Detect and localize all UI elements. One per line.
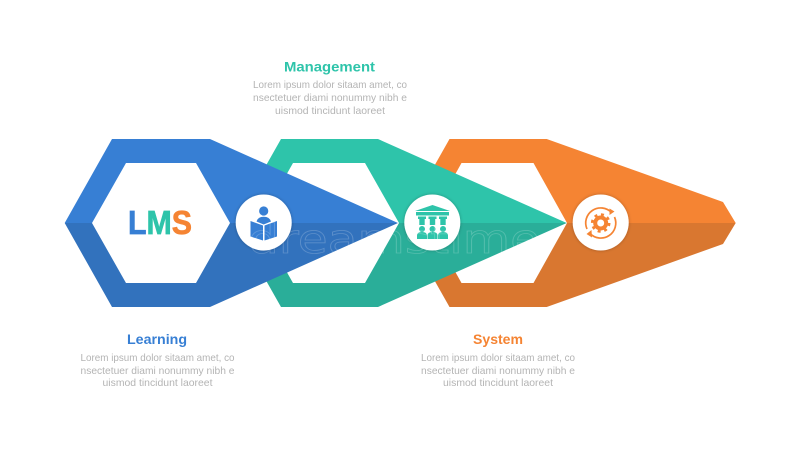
text block: System	[421, 331, 575, 389]
text block: Management	[253, 58, 407, 117]
text block: Management: nsectetuer diami nonummy nibh e	[253, 92, 407, 104]
icon: temple with people	[404, 194, 460, 250]
icon: reader with book	[236, 194, 292, 250]
text block: System: nsectetuer diami nonummy nibh e	[421, 365, 575, 377]
panel: orange arrow (System)	[402, 139, 736, 307]
text block: Learning: Learning	[127, 331, 187, 347]
text block: Management: uismod tincidunt laoreet	[275, 105, 385, 117]
text block: System: Lorem ipsum dolor sitaam amet, co	[421, 352, 575, 364]
text block: Management: Lorem ipsum dolor sitaam amet, co	[253, 79, 407, 91]
text block: Management: Management	[284, 58, 375, 74]
text block: Learning	[80, 331, 235, 389]
LMS wordmark: LMS	[128, 204, 192, 241]
text block: System: System	[473, 331, 523, 347]
text block: Learning: nsectetuer diami nonummy nibh e	[80, 365, 235, 377]
text block: System: uismod tincidunt laoreet	[443, 377, 553, 389]
panel: green arrow (Management)	[234, 139, 567, 307]
panel: blue arrow (Learning)	[65, 139, 398, 307]
icon: gear with rotating arrows	[573, 194, 629, 250]
watermark: dreamstime	[248, 217, 540, 263]
text block: Learning: Lorem ipsum dolor sitaam amet, co	[80, 352, 235, 364]
text block: Learning: uismod tincidunt laoreet	[102, 377, 213, 389]
